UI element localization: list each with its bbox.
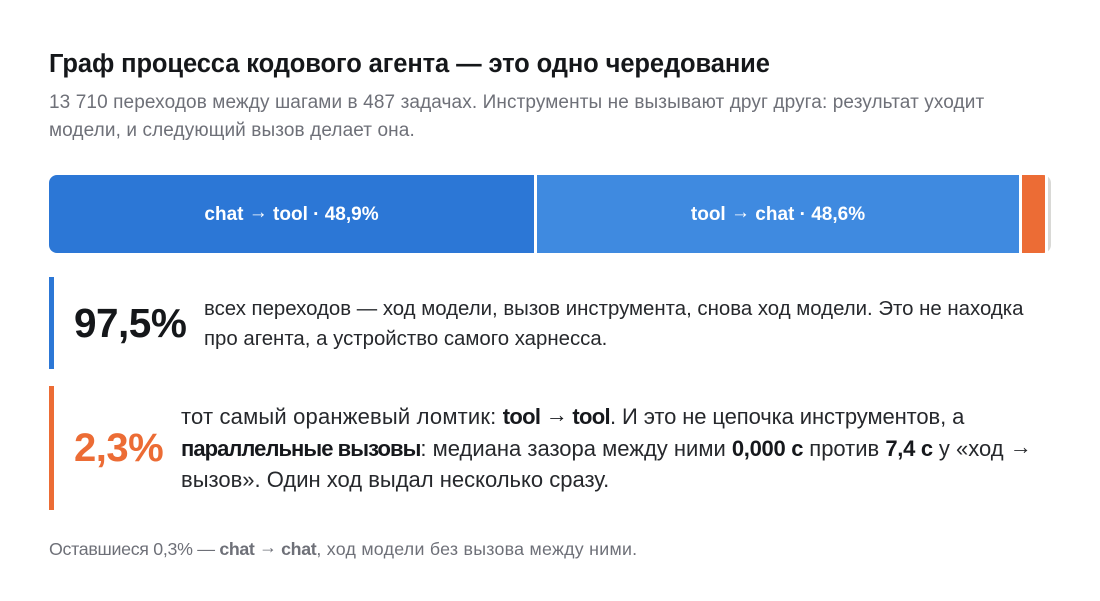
callout: 2,3% [49,386,1032,510]
callout: 97,5% [49,277,1024,369]
stat: 97,5%: 97,5% [74,300,186,346]
subtitle: 13 710 переходов между шагами в 487 задачах. Инструменты не вызывают друг друга: результат уходит [49,92,984,113]
accent bar: orange [49,386,54,510]
text: explanation: всех переходов — ход модели, вызов инструмента, снова ход модели. Это не находка [204,298,1023,320]
segment: tool to chat: tool → chat · 48,6% [691,202,865,225]
stacked bar: transition shares [49,175,1051,253]
footnote: Оставшиеся 0,3% — chat → chat, ход модели без вызова между ними. [49,537,637,559]
segment: chat to chat [1048,175,1051,253]
text: explanation: тот самый оранжевый ломтик: tool → tool. И это не цепочка инструментов, а [181,402,964,429]
text: explanation: про агента, а устройство самого харнесса. [204,328,607,350]
text: explanation: вызов». Один ход выдал несколько сразу. [181,467,609,492]
accent bar: blue [49,277,54,369]
subtitle [49,92,984,141]
text: explanation: параллельные вызовы: медиана зазора между ними 0,000 с против 7,4 с у «ход → [181,434,1032,461]
subtitle: модели, и следующий вызов делает она. [49,120,415,141]
segment: tool to tool [1022,175,1045,253]
stat: 2,3%: 2,3% [74,426,163,470]
segment: chat to tool: chat → tool · 48,9% [204,202,379,225]
title: Граф процесса кодового агента — это одно чередование [49,50,770,78]
text: explanation [204,298,1024,350]
text: explanation [181,402,1032,492]
segment: tool to chat [537,175,1019,253]
segment: chat to tool [49,175,534,253]
